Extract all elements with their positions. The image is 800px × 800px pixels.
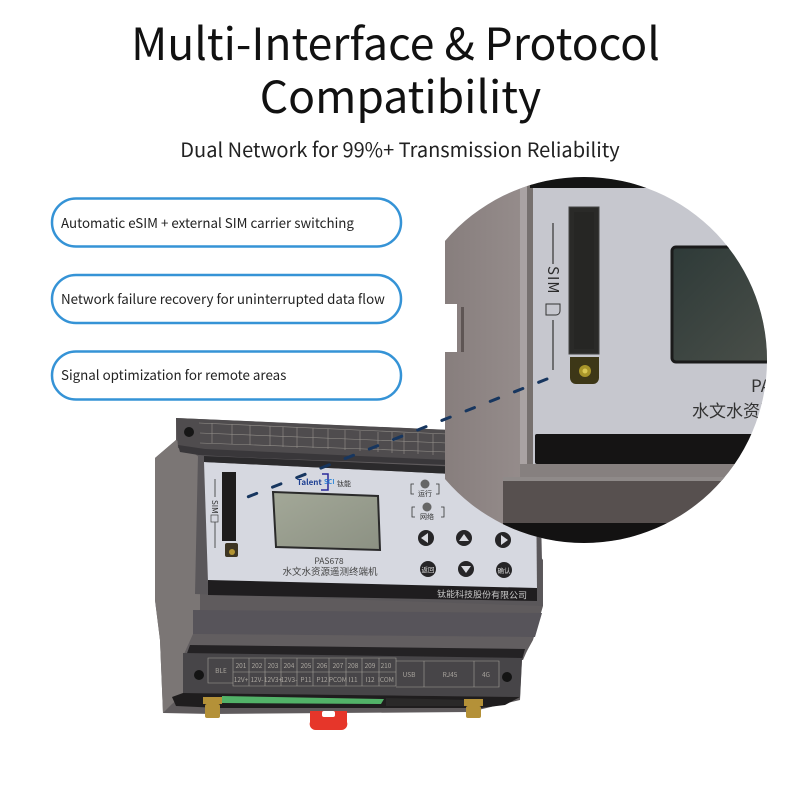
zoom: LCD screen	[672, 247, 782, 362]
green terminal connector	[222, 696, 384, 704]
bottom terminal block: 203	[268, 660, 279, 670]
pill: signal optimization	[52, 352, 401, 400]
logo: SCI	[324, 476, 334, 486]
device housing	[155, 418, 543, 714]
base under terminals	[172, 693, 520, 708]
logo: Talent	[297, 477, 322, 488]
bottom terminal block: 209	[365, 660, 376, 670]
LCD screen	[273, 492, 380, 550]
bottom terminal block: 12V-	[250, 674, 264, 684]
zoom: SIM slot	[569, 207, 599, 384]
bottom terminal block: ICOM	[378, 674, 394, 684]
subtitle: Dual Network for 99%+ Transmission Reliability	[180, 134, 620, 163]
black band with company name	[208, 580, 537, 602]
zoom: black band	[535, 434, 775, 464]
bottom terminal block: 201	[236, 660, 247, 670]
pill: eSIM switching: Automatic eSIM + external SIM carrier switching	[61, 213, 354, 232]
SIM slot	[209, 472, 238, 557]
zoom: model text	[692, 380, 766, 419]
bottom terminal block: 12V3+	[264, 674, 282, 684]
bottom terminal block: P11	[300, 674, 312, 684]
title: Multi-Interface & Protocol	[131, 8, 660, 73]
bottom terminal block: BLE	[215, 665, 227, 675]
pill: eSIM switching	[52, 198, 401, 246]
bottom terminal block: I11	[348, 674, 358, 684]
bottom terminal block: 208	[348, 660, 359, 670]
zoom: SIM label	[546, 223, 560, 370]
status indicators	[411, 480, 444, 522]
zoom: top dark band	[530, 177, 646, 188]
bottom terminal block: 12V3-	[281, 674, 297, 684]
status indicators: 运行	[418, 489, 432, 499]
zoom: device side wall	[445, 170, 533, 550]
bottom terminal block: 205	[301, 660, 312, 670]
status indicators: 网络	[420, 512, 434, 522]
front frame	[195, 455, 543, 606]
model text	[282, 555, 378, 578]
control buttons: 确认	[498, 565, 511, 575]
model text: 水文水资源遥测终端机	[282, 564, 378, 578]
zoom: SIM label: SIM	[543, 266, 564, 295]
zoom: lower housing	[520, 464, 734, 477]
logo: 钛能	[337, 479, 351, 489]
title: Compatibility	[260, 61, 541, 126]
magnified SIM slot circle	[445, 177, 767, 543]
bottom terminal block: I12	[365, 674, 375, 684]
ports	[386, 698, 470, 706]
bottom terminal block: 12V+	[234, 674, 249, 684]
bottom terminal block: RJ45	[443, 669, 458, 679]
lower ledge	[193, 610, 542, 637]
bottom terminal block: 210	[381, 660, 392, 670]
bottom terminal block: 4G	[482, 669, 490, 679]
white front panel	[204, 462, 537, 590]
model text: PAS678	[314, 555, 344, 567]
red DIN clip	[310, 711, 347, 730]
dashed connector line	[245, 379, 547, 498]
antenna connectors	[203, 697, 483, 718]
feature pills	[52, 198, 401, 400]
SIM slot: SIM	[209, 500, 220, 514]
bottom terminal block: PCOM	[329, 674, 347, 684]
bottom terminal block: 204	[284, 660, 295, 670]
black band with company name: 钛能科技股份有限公司	[437, 587, 527, 602]
control buttons	[418, 530, 512, 578]
bottom terminal block: 202	[252, 660, 263, 670]
bottom terminal block: P12	[316, 674, 328, 684]
pill: signal optimization: Signal optimization for remote areas	[61, 365, 286, 384]
bottom terminal block: 206	[317, 660, 328, 670]
zoom: side notch	[445, 304, 457, 352]
control buttons: 返回	[422, 564, 434, 574]
top terminal strip	[176, 418, 448, 465]
bottom terminal block	[183, 653, 522, 697]
logo	[297, 474, 351, 490]
bottom terminal block: 207	[333, 660, 344, 670]
zoom: model text: 水文水资源	[692, 397, 777, 422]
title	[131, 8, 660, 126]
bottom terminal block: USB	[403, 669, 415, 679]
pill: failure recovery	[52, 275, 401, 323]
pill: failure recovery: Network failure recovery for uninterrupted data flow	[61, 289, 385, 308]
device photo illustration	[155, 418, 543, 730]
